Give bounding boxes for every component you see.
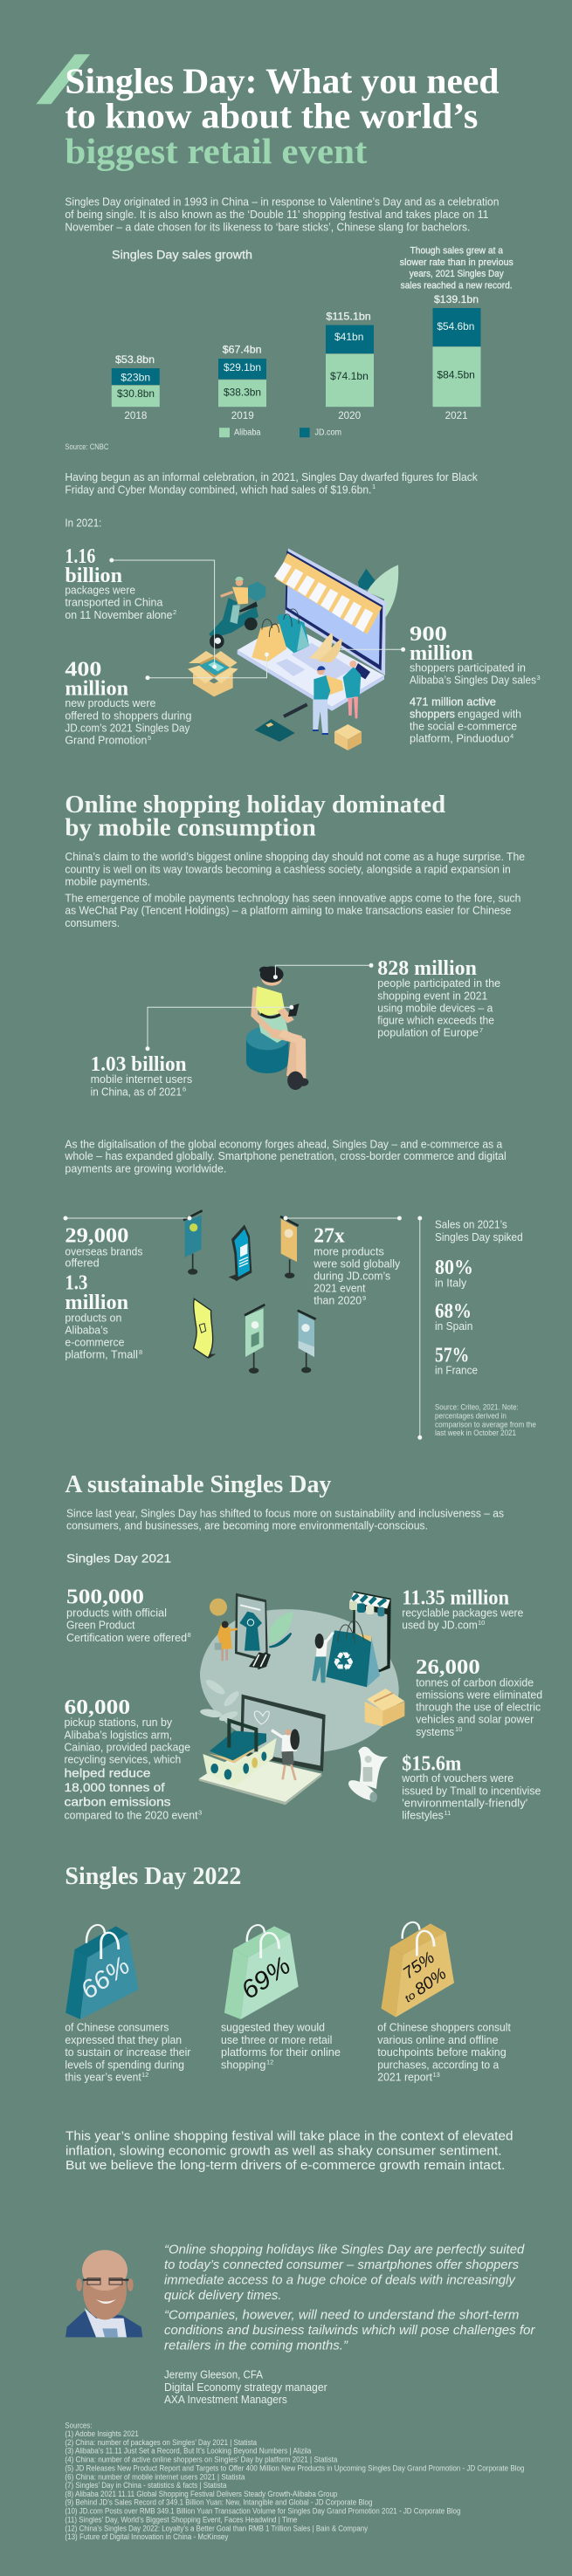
stat: 26,000 tonnes: emissions were eliminated <box>416 1689 542 1701</box>
quote: quick delivery times. <box>164 2288 281 2303</box>
heading: Singles Day 2022: Singles Day 2022 <box>65 1863 241 1890</box>
panel: sales spikes by country: in Italy <box>435 1277 467 1289</box>
stat: 60,000 pickup stations: helped reduce <box>65 1766 151 1780</box>
stat: 11.35 million packages: recyclable packages were <box>402 1607 523 1620</box>
stat: 26,000 tonnes <box>416 1656 542 1738</box>
icon: receipt <box>346 1747 388 1805</box>
heading: sustainable Singles Day: A sustainable Singles Day <box>65 1471 331 1498</box>
stat: $15.6m vouchers: worth of vouchers were <box>401 1772 513 1785</box>
stat block: 27x: were sold globally <box>313 1257 401 1270</box>
chart annotation: slower rate than in previous <box>400 257 513 268</box>
subheading: Singles Day 2021: Singles Day 2021 <box>66 1552 171 1565</box>
bars 2018: $30.8bn <box>117 387 155 400</box>
stat: $15.6m vouchers: 'environmentally-friendly' <box>402 1798 527 1810</box>
quote: immediate access to a huge choice of deals with increasingly <box>164 2272 516 2287</box>
text block: digitalisation: As the digitalisation of the global economy forges ahead, Singles Day – and e-commerce as a <box>65 1138 502 1150</box>
bars 2019: 2019 <box>231 409 254 421</box>
stat: 500,000 products: Certification were offered <box>66 1632 187 1644</box>
stat: 400 million products: Grand Promotion <box>65 735 147 747</box>
icon: pen and credit card <box>255 704 307 742</box>
text block: mobile payments: consumers. <box>65 917 120 929</box>
background blob <box>200 1609 399 1751</box>
panel: sales spikes by country: last week in October 2021 <box>435 1428 516 1437</box>
stat: 1.03 billion <box>91 1005 293 1098</box>
attribution: Digital Economy strategy manager <box>164 2381 327 2394</box>
stat: 11.35 million packages: 10 <box>478 1619 485 1627</box>
stat: 828 million <box>273 957 500 1039</box>
stat: $15.6m vouchers: lifestyles <box>402 1810 444 1822</box>
icon: high heels <box>308 633 342 662</box>
bars 2019 <box>218 344 266 421</box>
bars 2020: $41bn <box>334 331 363 343</box>
stat: 60,000 pickup stations: 3 <box>198 1808 202 1817</box>
chart annotation: years, 2021 Singles Day <box>410 269 504 279</box>
stat: 900 million shoppers: 4 <box>510 732 513 740</box>
stat block: 27x: 2021 event <box>314 1283 366 1295</box>
quote: retailers in the coming months.” <box>164 2338 348 2353</box>
sources: (11) Singles’ Day, World’s Biggest Shopping Event, Faces Headwind | Time <box>65 2515 297 2524</box>
illustration: sustainable shopping <box>199 1591 404 1805</box>
text: 75-80% touchpoints: various online and offline <box>377 2034 499 2046</box>
bars 2019: $67.4bn <box>223 344 262 356</box>
quote: conditions and business tailwinds which will pose challenges for <box>164 2323 535 2338</box>
source: Source: CNBC <box>65 442 109 451</box>
sources <box>65 2421 524 2541</box>
stat: 400 million products: new products were <box>65 697 155 709</box>
stat block: overseas brands and Tmall products: million <box>65 1291 128 1314</box>
stat: 26,000 tonnes: tonnes of carbon dioxide <box>416 1676 534 1689</box>
stat block: overseas brands and Tmall products: 29,000 <box>65 1224 128 1247</box>
text: 69% platforms: use three or more retail <box>221 2034 332 2046</box>
sources: (6) China: number of mobile internet users 2021 | Statista <box>65 2472 245 2481</box>
stat: 26,000 tonnes: 26,000 <box>416 1656 480 1679</box>
text block: digitalisation: payments are growing worldwide. <box>65 1162 226 1175</box>
panel: sales spikes by country: comparison to average from the <box>435 1420 536 1428</box>
stat: 400 million products: offered to shoppers during <box>65 709 191 722</box>
stat: 11.35 million packages <box>402 1586 523 1632</box>
title: Singles Day: What you need <box>65 61 500 101</box>
text: 66% of consumers: this year’s event <box>65 2072 141 2084</box>
stat: $15.6m vouchers: issued by Tmall to incentivise <box>402 1785 541 1797</box>
text block: mobile payments: The emergence of mobile payments technology has seen innovative apps come to the fore, such <box>65 892 520 904</box>
stat: 60,000 pickup stations: carbon emissions <box>65 1794 171 1808</box>
stat: 400 million products: 5 <box>148 734 151 742</box>
stat block: overseas brands and Tmall products: 8 <box>139 1348 142 1356</box>
heading: mobile consumption: Online shopping holiday dominated <box>65 791 446 819</box>
text: 69% platforms: shopping <box>221 2059 265 2071</box>
sources: (5) JD Releases New Product Report and Targets to Offer 400 Million New Products in Upcoming Singles Day Grand Promotion - JD Corporate Blog <box>65 2464 524 2473</box>
text block: Black Friday comparison <box>65 471 479 529</box>
intro text <box>65 196 499 233</box>
stat: 828 million: figure which exceeds the <box>377 1014 494 1026</box>
stat: 60,000 pickup stations: 18,000 tonnes of <box>65 1780 165 1794</box>
stat: 11.35 million packages: 11.35 million <box>402 1586 509 1609</box>
stat: 900 million shoppers: platform, Pinduoduo <box>410 733 510 745</box>
text block: mobile payments <box>65 851 525 929</box>
bars 2021: $139.1bn <box>434 293 479 305</box>
stat block: overseas brands and Tmall products: overseas brands <box>65 1245 142 1257</box>
illustration: woman on stool with phone <box>246 966 308 1090</box>
stat: 828 million: population of Europe <box>377 1027 479 1039</box>
text: 69% platforms: platforms for their online <box>221 2046 341 2059</box>
stat: 26,000 tonnes: through the use of electric <box>416 1701 541 1713</box>
text block: mobile payments: country is well on its way towards becoming a cashless society, alongside a rapid expansion in <box>65 863 511 875</box>
title <box>36 54 500 171</box>
icon: phone with dress <box>210 1593 293 1669</box>
panel: sales spikes by country: in Spain <box>435 1320 472 1333</box>
stat: 400 million products: million <box>65 678 128 701</box>
bars 2018 <box>112 353 160 421</box>
icon: laptop with awning <box>238 548 386 711</box>
stat: 60,000 pickup stations: 60,000 <box>65 1696 130 1719</box>
text block: digitalisation <box>64 1138 507 1175</box>
stat: 500,000 products: 500,000 <box>66 1586 144 1609</box>
bars 2019: $29.1bn <box>224 361 261 373</box>
stat: 1.03 billion: mobile internet users <box>91 1073 192 1086</box>
text block: context <box>65 2129 513 2173</box>
icon: open parcel box <box>188 651 238 696</box>
legend: JD.com <box>314 428 341 437</box>
attribution: AXA Investment Managers <box>164 2394 287 2406</box>
icon: shopping bags <box>252 609 309 661</box>
stat: 1.16 billion packages: on 11 November alone <box>65 609 172 621</box>
bars 2021: $54.6bn <box>437 320 474 332</box>
icon: green banner <box>245 1305 265 1374</box>
stat: 500,000 products: 8 <box>187 1631 191 1639</box>
icon: parcel <box>365 1689 404 1726</box>
text block: Black Friday comparison: In 2021: <box>65 517 101 529</box>
panel: sales spikes by country: in France <box>435 1364 478 1376</box>
icon: gold bag 75% to 80%: to <box>403 1989 418 2004</box>
icon: gold bag 75% to 80% <box>381 1922 454 2018</box>
stat: 900 million shoppers: 900 <box>410 623 447 646</box>
bars 2020: 2020 <box>338 409 362 421</box>
text: 66% of consumers: 12 <box>141 2071 148 2079</box>
stat block: 27x: 9 <box>362 1294 366 1302</box>
title: to know about the world’s <box>65 95 478 135</box>
stat block: overseas brands and Tmall products: offered <box>65 1257 100 1270</box>
stat: 60,000 pickup stations: Alibaba’s logistics arm, <box>65 1729 172 1741</box>
stat block: 27x: during JD.com’s <box>314 1271 390 1283</box>
stat: 900 million shoppers: million <box>410 642 473 665</box>
stat block: overseas brands and Tmall products: platform, Tmall <box>65 1349 138 1361</box>
text block: Black Friday comparison: Friday and Cyber Monday combined, which had sales of $19.6bn. <box>65 483 371 496</box>
stat: 400 million products <box>65 653 269 747</box>
text block: mobile payments: China’s claim to the world’s biggest online shopping day should not come as a huge surprise. The <box>65 851 525 863</box>
bars 2018: $23bn <box>121 371 150 383</box>
text: 75-80% touchpoints: touchpoints before making <box>377 2046 507 2059</box>
stat: 60,000 pickup stations <box>65 1696 202 1821</box>
icon: pale leaves <box>199 1677 241 1723</box>
stat block: 27x: 27x <box>314 1224 345 1247</box>
stat: 26,000 tonnes: systems <box>416 1726 454 1738</box>
stat: 1.16 billion packages: billion <box>65 565 122 587</box>
stat: $15.6m vouchers: $15.6m <box>402 1752 461 1775</box>
bars 2019: $38.3bn <box>224 387 261 399</box>
stat: 500,000 products <box>66 1586 191 1644</box>
stat: 1.16 billion packages <box>65 545 217 668</box>
stat block: overseas brands and Tmall products: e-commerce <box>65 1336 124 1348</box>
sources: (12) China’s Singles Day 2022: Loyalty’s a Better Goal than RMB 1 Trillion Sales | Bain & Company <box>65 2524 369 2532</box>
bars 2020: $115.1bn <box>326 311 371 323</box>
stat: 400 million products: 400 <box>65 659 101 682</box>
icon: teal bag 66% <box>65 1925 139 2019</box>
panel: sales spikes by country: 68% <box>435 1300 472 1323</box>
quote: to today’s connected consumer – smartphones offer shoppers <box>164 2257 519 2272</box>
sources: Sources: <box>65 2421 92 2429</box>
stat: 26,000 tonnes: 10 <box>455 1725 462 1733</box>
stat block: overseas brands and Tmall products: Alibaba’s <box>65 1324 108 1336</box>
panel: sales spikes by country: 80% <box>435 1257 473 1279</box>
stat: $15.6m vouchers: 11 <box>444 1809 451 1817</box>
sources: (4) China: number of active online shoppers on Singles’ Day by platform 2021 | Statista <box>65 2456 337 2464</box>
stat: 1.03 billion: in China, as of 2021 <box>91 1086 182 1098</box>
icon: teal banner <box>183 1210 203 1275</box>
text block: mobile payments: as WeChat Pay (Tencent Holdings) – a platform aiming to make transactions easier for Chinese <box>65 905 511 917</box>
bars 2018: 2018 <box>124 409 148 421</box>
legend <box>219 428 341 437</box>
photo: Jeremy Gleeson portrait <box>65 2250 142 2337</box>
stat: 11.35 million packages: used by JD.com <box>402 1620 478 1632</box>
text: 75-80% touchpoints: 13 <box>433 2071 440 2079</box>
heading: mobile consumption: by mobile consumption <box>65 815 316 842</box>
stat: 900 million shoppers: engaged with <box>458 708 521 720</box>
stat: 900 million shoppers: 471 million active <box>410 695 496 708</box>
chart annotation <box>400 246 513 291</box>
sources: (13) Future of Digital Innovation in China - McKinsey <box>65 2532 229 2541</box>
stat: 1.16 billion packages: 2 <box>173 608 176 616</box>
bar chart: Singles Day sales growth <box>65 246 513 451</box>
icon: phone shop with recycling bag <box>312 1591 391 1687</box>
icon: leaves <box>358 565 398 617</box>
sources: (3) Alibaba’s 11.11 Just Set a Record, But It’s Looking Beyond Numbers | Alizila <box>65 2447 311 2456</box>
stat: 26,000 tonnes: vehicles and solar power <box>416 1714 534 1726</box>
text block: sustainability <box>66 1507 504 1532</box>
stat: $15.6m vouchers <box>401 1752 541 1822</box>
sources: (7) Singles’ Day in China - statistics & facts | Statista <box>65 2481 226 2490</box>
bars 2018: $53.8bn <box>115 353 155 366</box>
stat: 900 million shoppers: 3 <box>536 674 541 682</box>
stat: 1.16 billion packages: packages were <box>65 584 135 596</box>
intro text: of being single. It is also known as the ‘Double 11’ shopping festival and takes place on 11 <box>65 209 488 221</box>
stat: 900 million shoppers: shoppers participated in <box>410 661 526 674</box>
icon: phone shop with recycling bag: ♻ <box>332 1647 355 1676</box>
text: 66% of consumers: levels of spending during <box>65 2059 184 2071</box>
icon: gold bag 75% to 80%: 75% <box>400 1949 438 1983</box>
text: 66% of consumers: to sustain or increase their <box>65 2046 190 2059</box>
sources: (9) Behind JD’s Sales Record of 349.1 Billion Yuan: New, Intangible and Global - JD Corporate Blog <box>65 2498 372 2507</box>
panel: sales spikes by country: Singles Day spiked <box>435 1231 523 1243</box>
quote: “Companies, however, will need to understand the short-term <box>164 2307 519 2322</box>
text: 66% of consumers: expressed that they plan <box>65 2034 182 2046</box>
text: 66% of consumers: of Chinese consumers <box>65 2022 169 2034</box>
chart annotation: sales reached a new record. <box>401 280 513 291</box>
icon: green bag 69%: 69% <box>237 1952 296 2005</box>
stat block: overseas brands and Tmall products <box>63 1216 192 1361</box>
legend: Alibaba <box>234 428 261 437</box>
text: 75-80% touchpoints <box>377 2022 511 2084</box>
sources: (1) Adobe Insights 2021 <box>65 2429 139 2438</box>
text block: Black Friday comparison: Having begun as an informal celebration, in 2021, Singles Day dwarfed figures for Black <box>65 471 479 483</box>
stat: 828 million: using mobile devices – a <box>377 1002 493 1014</box>
icon: blue kiosk <box>229 1224 252 1281</box>
icon: teal bag 66%: 66% <box>76 1952 135 2005</box>
text: 75-80% touchpoints: of Chinese shoppers consult <box>377 2022 511 2034</box>
stat: 1.03 billion: 1.03 billion <box>91 1053 187 1076</box>
panel: sales spikes by country: percentages derived in <box>435 1411 507 1420</box>
panel: sales spikes by country: 57% <box>435 1345 469 1367</box>
stat: 828 million: shopping event in 2021 <box>377 990 487 1002</box>
text: 66% of consumers <box>65 2022 190 2084</box>
stat: 828 million: people participated in the <box>377 977 500 990</box>
panel: sales spikes by country <box>417 1216 536 1440</box>
bars 2020: $74.1bn <box>330 370 369 382</box>
stat block: 27x: than 2020 <box>314 1295 362 1307</box>
icon: laptop with basket and shopper <box>199 1695 326 1805</box>
stat: 400 million products: JD.com’s 2021 Singles Day <box>65 723 190 735</box>
text: 69% platforms: suggested they would <box>221 2022 325 2034</box>
icon: blue-grey banner <box>298 1311 316 1373</box>
stat: 60,000 pickup stations: pickup stations, run by <box>65 1716 173 1729</box>
text block: context: This year’s online shopping festival will take place in the context of elevated <box>65 2129 513 2144</box>
text block: sustainability: consumers, and businesses, are becoming more environmentally-conscious. <box>66 1520 428 1532</box>
stat: 900 million shoppers: shoppers <box>410 708 455 720</box>
text block: context: inflation, slowing economic growth as well as shaky consumer sentiment. <box>65 2143 502 2158</box>
text: 75-80% touchpoints: 2021 report <box>377 2072 433 2084</box>
icon: small parcel <box>334 724 362 750</box>
icon: gold banner <box>280 1216 299 1278</box>
intro text: Singles Day originated in 1993 in China – in response to Valentine’s Day and as a celebration <box>65 196 499 209</box>
stat block: overseas brands and Tmall products: products on <box>65 1312 121 1324</box>
icon: yellow wavy banner <box>194 1298 216 1359</box>
stat: 500,000 products: Green Product <box>66 1620 135 1632</box>
illustration: online shopfront laptop <box>188 548 398 750</box>
stat block: 27x <box>283 1216 402 1307</box>
stat: 1.16 billion packages: 1.16 <box>65 545 95 568</box>
stat: 900 million shoppers: Alibaba’s Singles Day sales <box>410 675 536 687</box>
stat: 60,000 pickup stations: compared to the 2020 event <box>65 1809 198 1821</box>
text block: Black Friday comparison: 1 <box>372 483 376 490</box>
stat: 1.16 billion packages: transported in China <box>65 597 162 609</box>
text block: context: But we believe the long-term drivers of e-commerce growth remain intact. <box>65 2158 505 2173</box>
sources: (2) China: number of packages on Singles’ Day 2021 | Statista <box>65 2438 257 2447</box>
stat: 500,000 products: products with official <box>66 1607 167 1619</box>
stat: 900 million shoppers <box>339 623 541 745</box>
attribution: Jeremy Gleeson, CFA <box>164 2369 264 2381</box>
intro text: November – a date chosen for its likeness to ‘bare sticks’, Chinese slang for bachelors. <box>65 221 470 233</box>
stat: 60,000 pickup stations: recycling services, which <box>65 1754 181 1766</box>
sources: (8) Alibaba 2021 11.11 Global Shopping Festival Delivers Steady Growth-Alibaba Group <box>65 2490 337 2498</box>
stat block: overseas brands and Tmall products: 1.3 <box>65 1272 87 1295</box>
bars 2021 <box>433 293 480 421</box>
stat: 60,000 pickup stations: Cainiao, provided package <box>65 1741 190 1753</box>
text block: digitalisation: whole – has expanded globally. Smartphone penetration, cross-border commerce and digital <box>64 1150 507 1162</box>
stat: 900 million shoppers: the social e-commerce <box>410 720 517 732</box>
quote <box>164 2242 535 2353</box>
bars 2020 <box>326 311 374 421</box>
stat: 1.03 billion: 6 <box>183 1086 186 1093</box>
text block: sustainability: Since last year, Singles Day has shifted to focus more on sustainability and inclusiveness – as <box>66 1507 504 1519</box>
text: 69% platforms: 12 <box>266 2058 273 2066</box>
text block: mobile payments: mobile payments. <box>65 875 150 887</box>
panel: sales spikes by country: Source: Criteo, 2021. Note: <box>435 1403 519 1412</box>
icon: shoppers exchanging parcel <box>313 661 370 735</box>
illustration: product banners <box>183 1210 316 1374</box>
text: 69% platforms <box>221 2022 341 2071</box>
panel: sales spikes by country: Sales on 2021’s <box>435 1219 507 1231</box>
sources: (10) JD.com Posts over RMB 349.1 Billion Yuan Transaction Volume for Singles Day Grand Promotion 2021 - JD Corporate Blog <box>65 2507 460 2516</box>
icon: gold bag 75% to 80%: 80% <box>411 1964 450 1999</box>
icon: green bag 69% <box>224 1925 299 2019</box>
stat: 828 million: 7 <box>479 1026 483 1034</box>
title: biggest retail event <box>65 131 368 171</box>
heading: mobile consumption <box>65 791 446 842</box>
bars 2021: 2021 <box>445 409 468 421</box>
stat block: 27x: more products <box>314 1245 384 1257</box>
text: 75-80% touchpoints: purchases, according to a <box>377 2059 499 2071</box>
bars 2021: $84.5bn <box>437 368 475 380</box>
attribution <box>164 2369 327 2406</box>
chart annotation: Though sales grew at a <box>410 246 504 257</box>
stat: 828 million: 828 million <box>377 957 477 980</box>
quote: “Online shopping holidays like Singles Day are perfectly suited <box>164 2242 525 2257</box>
icon: delivery scooter <box>209 577 265 648</box>
chart title: Singles Day sales growth <box>112 248 252 262</box>
